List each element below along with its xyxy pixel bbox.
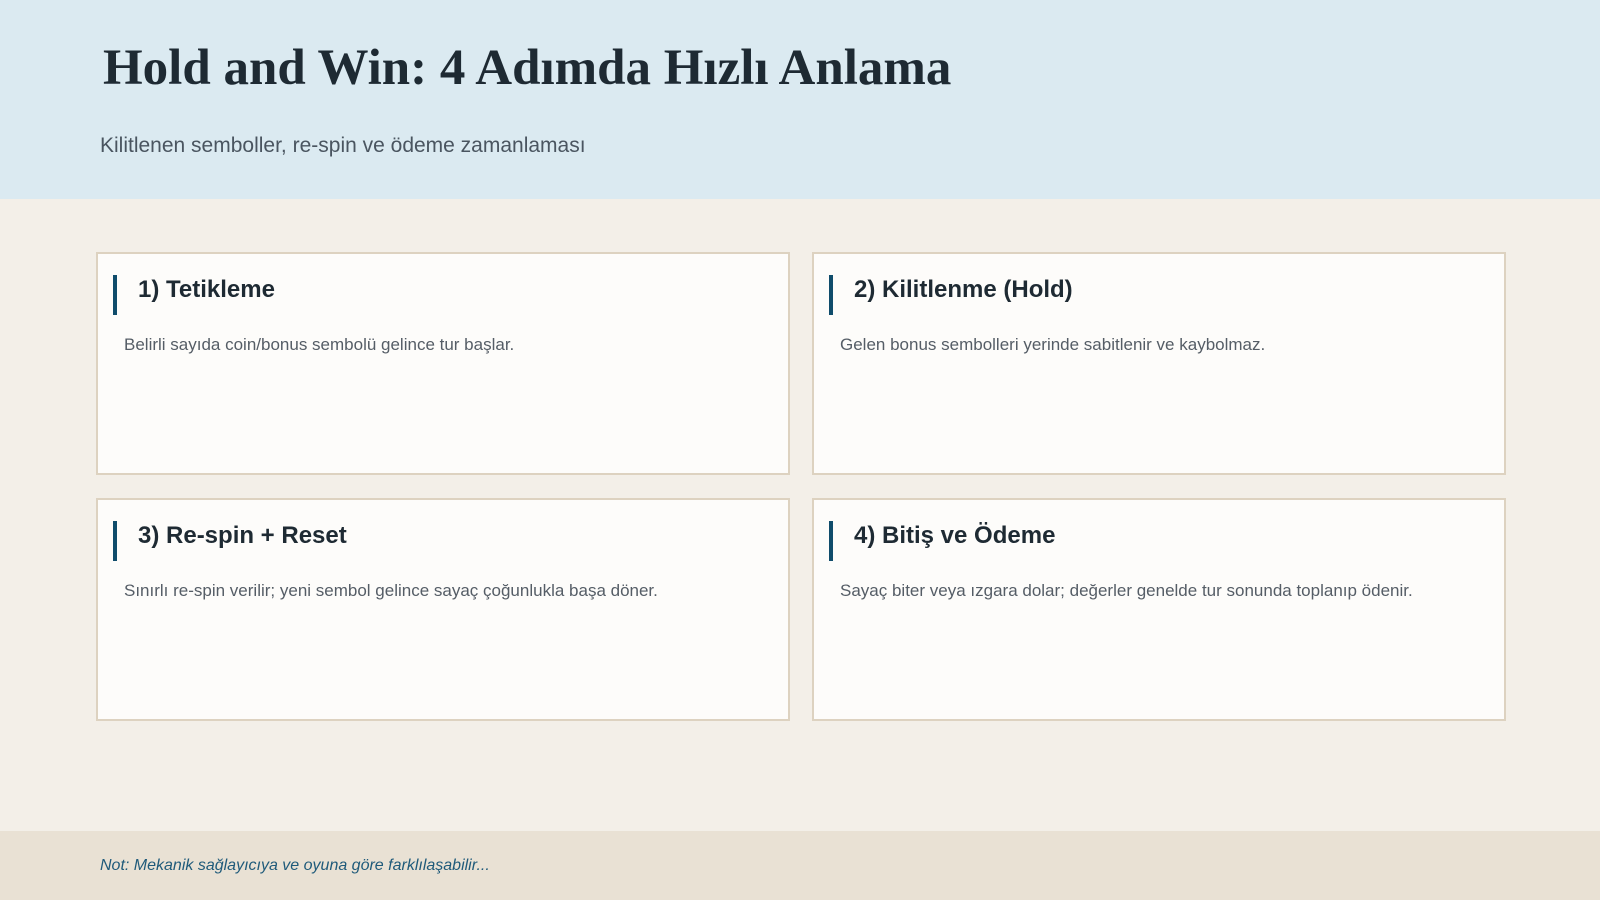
- footer: [0, 831, 1600, 900]
- accent bar: [829, 275, 833, 315]
- text: Belirli sayıda coin/bonus sembolü gelince tur başlar.: [124, 335, 514, 354]
- text: Sayaç biter veya ızgara dolar; değerler genelde tur sonunda toplanıp ödenir.: [840, 581, 1413, 600]
- heading: 4) Bitiş ve Ödeme: [854, 522, 1055, 549]
- footer note: Not: Mekanik sağlayıcıya ve oyuna göre farklılaşabilir...: [100, 857, 490, 874]
- text: Gelen bonus sembolleri yerinde sabitlenir ve kaybolmaz.: [840, 335, 1265, 354]
- panel: step 2: [812, 252, 1506, 475]
- heading: 2) Kilitlenme (Hold): [854, 276, 1073, 303]
- panel: step 1: [96, 252, 790, 475]
- heading: 1) Tetikleme: [138, 276, 275, 303]
- accent bar: [113, 521, 117, 561]
- header: [0, 0, 1600, 199]
- title: Hold and Win: 4 Adımda Hızlı Anlama: [103, 40, 951, 96]
- subtitle: Kilitlenen semboller, re-spin ve ödeme zamanlaması: [100, 134, 586, 157]
- accent bar: [113, 275, 117, 315]
- text: Sınırlı re-spin verilir; yeni sembol gelince sayaç çoğunlukla başa döner.: [124, 581, 658, 600]
- panel: step 4: [812, 498, 1506, 721]
- panel: step 3: [96, 498, 790, 721]
- accent bar: [829, 521, 833, 561]
- heading: 3) Re-spin + Reset: [138, 522, 347, 549]
